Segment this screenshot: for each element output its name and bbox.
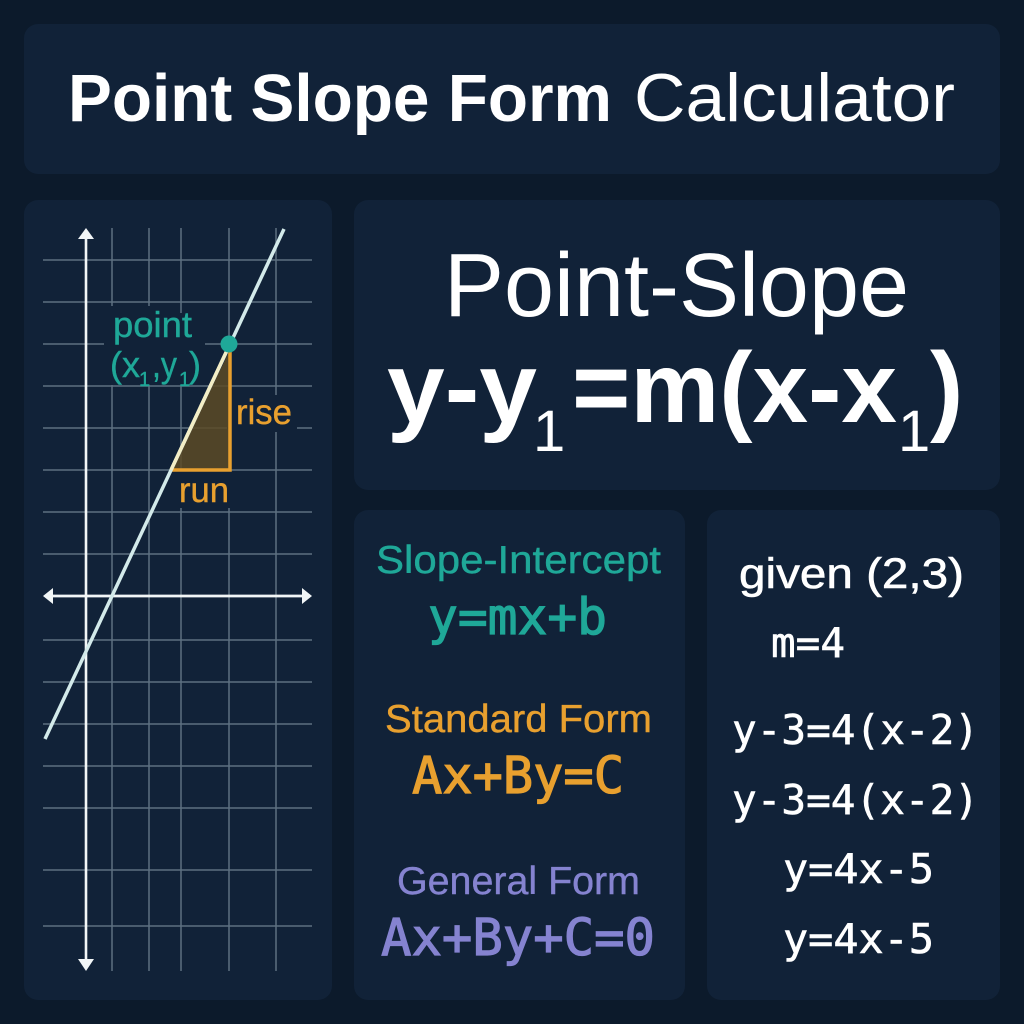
form: general: General Form: [397, 860, 640, 903]
formula: point-slope: y-y: [387, 332, 537, 444]
example step 2: y-3=4(x-2): [732, 776, 979, 824]
vertical axis arrow: [78, 228, 94, 971]
formula: point-slope: =m(x-x: [572, 332, 897, 444]
heading: point-slope: Point-Slope: [444, 236, 909, 336]
label: point: [110, 304, 201, 391]
form: standard: Ax+By=C: [412, 747, 624, 806]
label: point: 1: [139, 369, 150, 391]
form: general: [381, 860, 655, 968]
form: slope-intercept: Slope-Intercept: [376, 539, 661, 582]
panel: title header: [24, 24, 1000, 174]
rise and run triangle: [171, 352, 230, 470]
example step 4: y=4x-5: [783, 915, 934, 963]
panel: other forms: [354, 510, 685, 1000]
form: general: Ax+By+C=0: [381, 909, 655, 968]
panel: point-slope formula: [354, 200, 1000, 490]
title: [68, 60, 955, 136]
form: slope-intercept: y=mx+b: [428, 588, 607, 646]
title: Calculator: [634, 60, 955, 136]
title: Point Slope Form: [68, 61, 612, 136]
label: point: ,y: [152, 344, 177, 385]
label: point: ): [189, 344, 201, 385]
panel: worked example: [707, 510, 1000, 1000]
horizontal axis arrow: [43, 588, 312, 604]
label: point: 1: [179, 369, 190, 391]
point marker: [220, 336, 238, 352]
label: point: point: [113, 304, 192, 345]
example step 1: y-3=4(x-2): [732, 706, 979, 754]
formula: point-slope: 1: [898, 399, 930, 464]
panel: coordinate graph: [24, 200, 332, 1000]
example step 3: y=4x-5: [783, 845, 934, 893]
grid lines: [43, 228, 312, 971]
label: rise: rise: [236, 393, 292, 432]
form: standard: Standard Form: [385, 698, 652, 741]
example given point: given (2,3): [739, 550, 964, 598]
example slope: m=4: [771, 619, 845, 667]
form: slope-intercept: [376, 539, 661, 646]
label: run: run: [179, 471, 229, 510]
form: standard: [385, 698, 652, 806]
formula: point-slope: 1: [533, 399, 565, 464]
formula: point-slope: ): [930, 332, 963, 444]
formula: point-slope: [387, 332, 963, 464]
label: point: (x: [110, 344, 140, 385]
slope line: [45, 229, 284, 739]
